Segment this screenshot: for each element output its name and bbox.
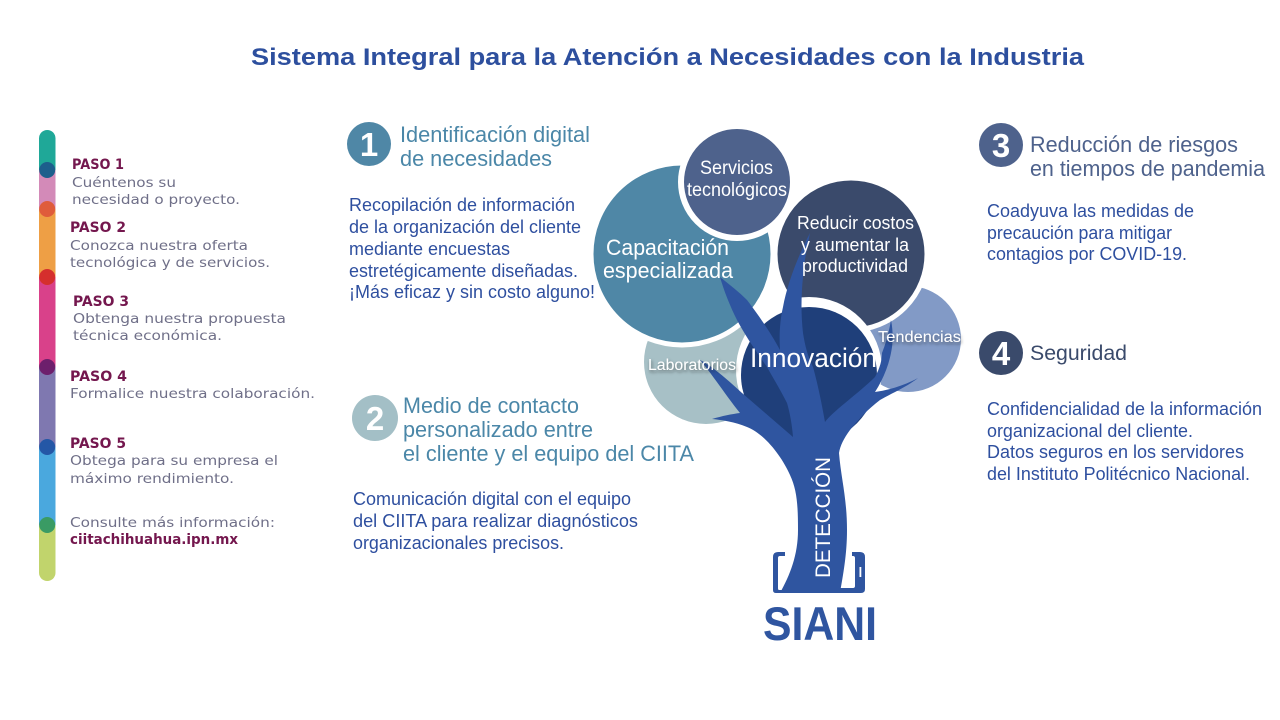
label: laboratorios: Laboratorios [648, 357, 736, 374]
heading 2 [403, 393, 694, 466]
circle: servicios [681, 126, 793, 238]
step 2: PASO 2 [70, 220, 126, 236]
step 5: Obtega para su empresa el [70, 453, 278, 469]
step 5 [70, 436, 278, 487]
panel: point 4 [979, 331, 1262, 484]
step 3 [73, 294, 286, 344]
icon: badge 3 [979, 123, 1023, 167]
more information: ciitachihuahua.ipn.mx [70, 532, 238, 548]
text block 2: del CIITA para realizar diagnósticos [353, 511, 638, 531]
tree trunk and branches [700, 233, 918, 593]
step 5: máximo rendimiento. [70, 471, 234, 487]
icon: badge 4 [979, 331, 1023, 375]
step 1: PASO 1 [72, 157, 124, 173]
text block 2: Comunicación digital con el equipo [353, 489, 631, 509]
panel: point 3 [979, 123, 1266, 264]
label: capacitación especializada: Capacitación [606, 235, 729, 260]
text block 3 [987, 201, 1194, 264]
heading 1: de necesidades [400, 146, 552, 171]
circle: tendencias [855, 286, 961, 392]
heading 3: en tiempos de pandemia [1030, 156, 1266, 181]
text block 4: organizacional del cliente. [987, 421, 1193, 441]
text block 3: precaución para mitigar [987, 223, 1172, 243]
icon: badge 2 [352, 395, 398, 441]
label: reducir costos: productividad [802, 255, 908, 276]
step 3: PASO 3 [73, 294, 129, 310]
label: servicios tecnológicos [687, 158, 787, 201]
logo wordmark: SIANI [763, 597, 877, 650]
text block 3: contagios por COVID-19. [987, 244, 1187, 264]
text block 1 [349, 195, 595, 302]
text block 1: Recopilación de información [349, 195, 575, 215]
circle: reducir costos [775, 178, 927, 330]
tree diagram [591, 126, 961, 650]
label: servicios tecnológicos: tecnológicos [687, 180, 787, 201]
white ring behind innovación [736, 297, 882, 443]
circle: capacitación [591, 163, 773, 345]
label: reducir costos: Reducir costos [797, 212, 914, 233]
text block 1: estretégicamente diseñadas. [349, 261, 578, 281]
heading 2: el cliente y el equipo del CIITA [403, 441, 694, 466]
step 1 [72, 157, 240, 208]
heading 2: Medio de contacto [403, 393, 579, 418]
heading 1 [400, 122, 590, 171]
text block 4 [987, 399, 1262, 484]
label: tendencias: Tendencias [878, 329, 961, 346]
label: servicios tecnológicos: Servicios [700, 158, 773, 179]
label: capacitación especializada [603, 235, 734, 283]
more information [70, 515, 275, 548]
circle: innovación [741, 307, 877, 443]
text block 4: Datos seguros en los servidores [987, 442, 1244, 462]
step 2: Conozca nuestra oferta [70, 238, 248, 254]
step 3: Obtenga nuestra propuesta [73, 311, 286, 327]
panel: point 1 [347, 122, 595, 302]
icon: badge 3: 3 [992, 127, 1010, 164]
step 1: necesidad o proyecto. [72, 192, 240, 208]
text block 4: del Instituto Politécnico Nacional. [987, 464, 1250, 484]
title: Sistema Integral para la Atención a Necesidades con la Industria [251, 44, 1085, 71]
icon: badge 1: 1 [360, 126, 378, 163]
heading 3: Reducción de riesgos [1030, 132, 1238, 157]
heading 1: Identificación digital [400, 122, 590, 147]
step 4: Formalice nuestra colaboración. [70, 386, 315, 402]
label: innovación: Innovación [750, 343, 877, 373]
heading 2: personalizado entre [403, 417, 593, 442]
step 5: PASO 5 [70, 436, 126, 452]
text block 4: Confidencialidad de la información [987, 399, 1262, 419]
heading 3 [1030, 132, 1266, 181]
step 4 [70, 369, 315, 402]
circle: laboratorios [644, 300, 768, 424]
timeline bar [39, 130, 56, 581]
label: reducir costos [797, 212, 914, 276]
step 4: PASO 4 [70, 369, 127, 385]
text block 3: Coadyuva las medidas de [987, 201, 1194, 221]
text block 2: organizacionales precisos. [353, 533, 564, 553]
heading 4: Seguridad [1030, 342, 1127, 365]
icon: badge 2: 2 [366, 400, 384, 437]
more information: Consulte más información: [70, 515, 275, 531]
step 2: tecnológica y de servicios. [70, 255, 270, 271]
text block 1: ¡Más eficaz y sin costo alguno! [349, 282, 595, 302]
label: reducir costos: y aumentar la [801, 234, 910, 255]
text block 1: de la organización del cliente [349, 217, 581, 237]
icon: badge 4: 4 [992, 335, 1011, 372]
step 2 [70, 220, 270, 271]
phone frame icon [773, 552, 865, 593]
panel: point 2 [352, 393, 694, 553]
text block 1: mediante encuestas [349, 239, 510, 259]
step 1: Cuéntenos su [72, 175, 176, 191]
text block 2 [353, 489, 638, 553]
step 3: técnica económica. [73, 328, 222, 344]
icon: badge 1 [347, 122, 391, 166]
label: detección: DETECCIÓN [812, 457, 835, 578]
label: capacitación especializada: especializada [603, 258, 734, 283]
